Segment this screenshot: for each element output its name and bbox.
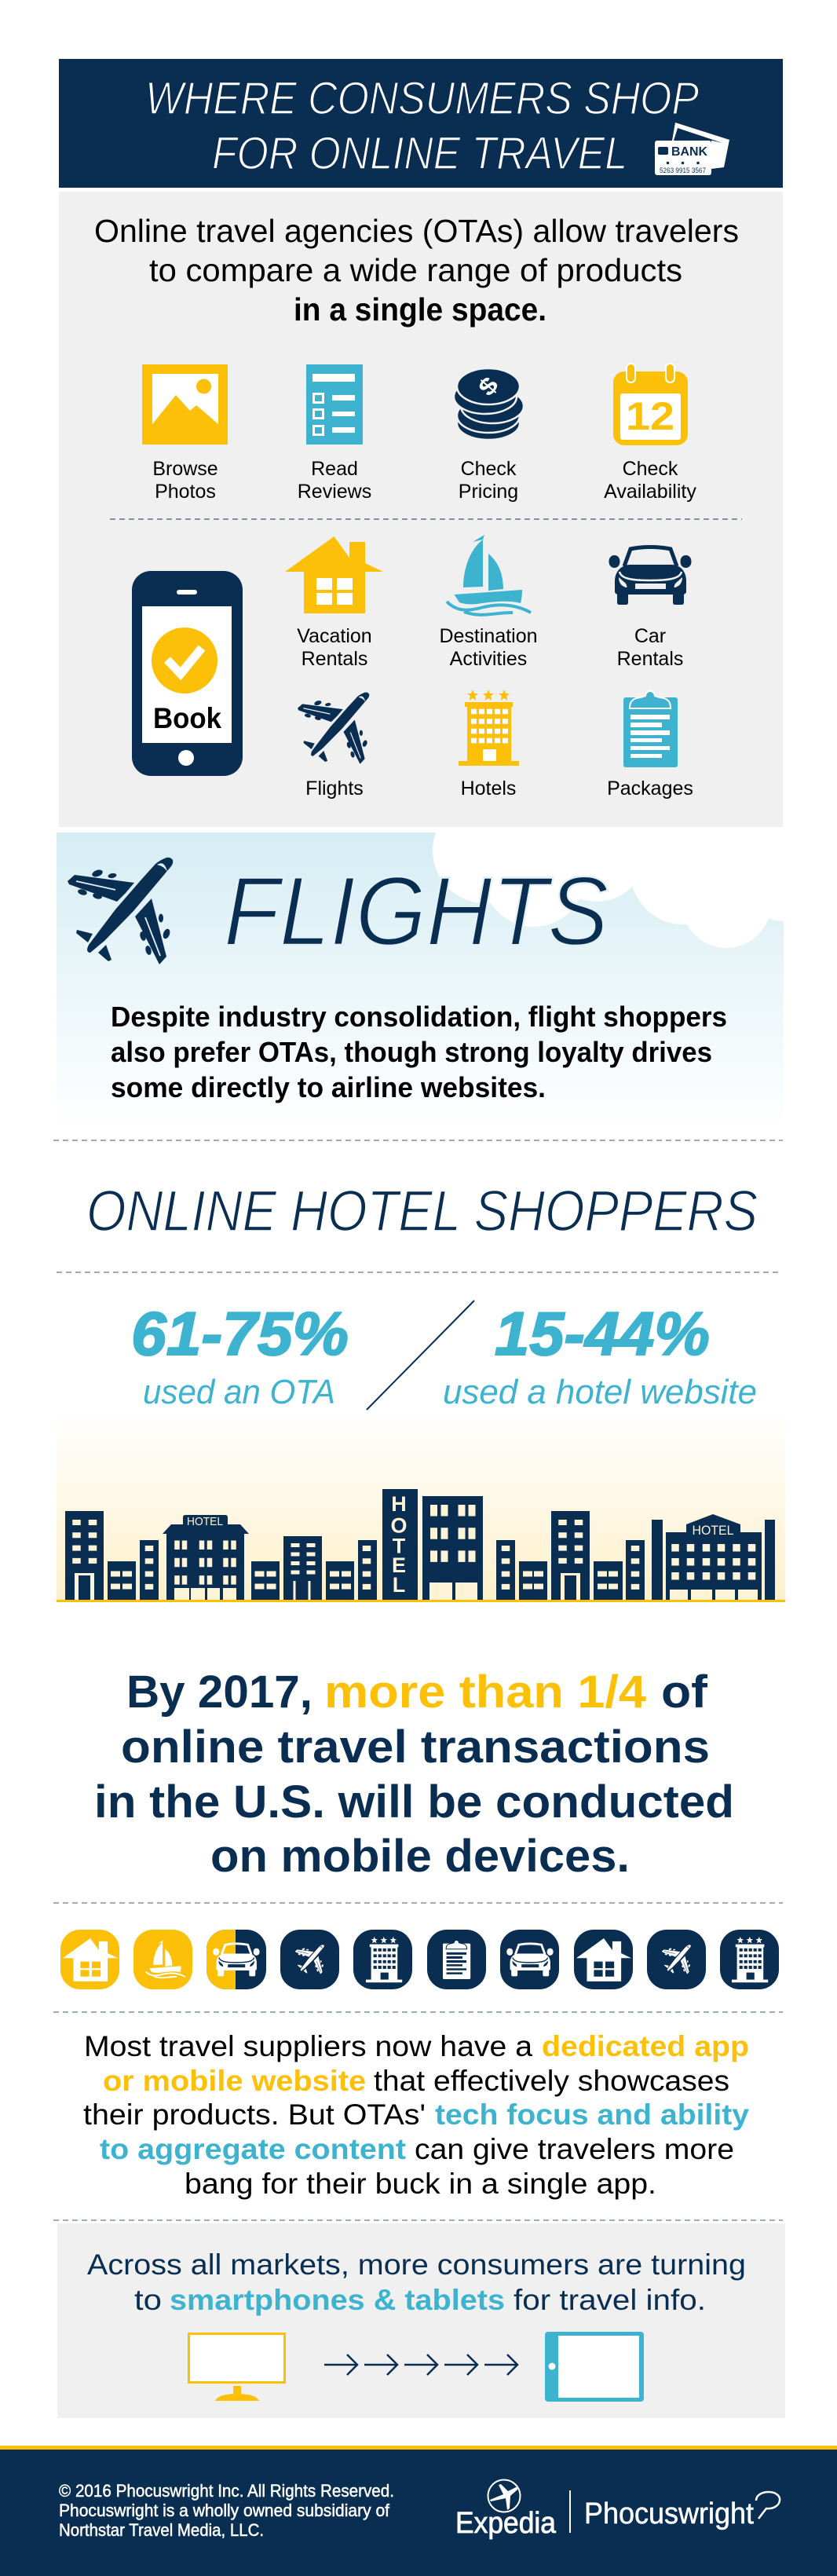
suppliers paragraph: Most travel suppliers now have a bbox=[84, 2030, 532, 2062]
feature labels row two bbox=[297, 625, 693, 800]
feature labels row two: Destination bbox=[439, 625, 538, 647]
stat: hotel website share: used a hotel website bbox=[443, 1373, 757, 1411]
feature labels row two: Rentals bbox=[302, 648, 367, 670]
stat: OTA share: used an OTA bbox=[143, 1373, 335, 1411]
callout text: to bbox=[134, 2284, 162, 2316]
body text: Despite industry consolidation, flight shoppers bbox=[111, 1001, 727, 1033]
icon: coins: $ bbox=[473, 371, 504, 401]
panel: across all markets bbox=[57, 2223, 785, 2418]
heading: ONLINE HOTEL SHOPPERS bbox=[86, 1180, 758, 1243]
feature labels row two: Activities bbox=[450, 648, 527, 670]
suppliers paragraph: their products. But OTAs' bbox=[83, 2098, 426, 2131]
icon: clipboard bbox=[623, 691, 678, 767]
city skyline: HOTEL bbox=[187, 1515, 223, 1528]
mobile headline: in the U.S. will be conducted bbox=[94, 1776, 734, 1828]
city skyline: O bbox=[390, 1514, 408, 1538]
icon: phone with book: Book bbox=[153, 702, 221, 734]
icon: car bbox=[609, 547, 691, 605]
suppliers paragraph: to aggregate content bbox=[100, 2133, 406, 2165]
feature labels row one: Photos bbox=[155, 481, 216, 503]
city skyline: HOTEL bbox=[693, 1523, 733, 1538]
feature labels row two: Vacation bbox=[297, 625, 372, 647]
icon: bank cards bbox=[655, 123, 729, 175]
intro text: in a single space. bbox=[294, 291, 546, 327]
icon: desktop monitor bbox=[188, 2334, 284, 2401]
suppliers paragraph: or mobile website bbox=[103, 2065, 366, 2097]
logo: Phocuswright: Phocuswright bbox=[584, 2497, 754, 2530]
suppliers paragraph: can give travelers more bbox=[415, 2133, 734, 2165]
feature labels row two: Car bbox=[634, 625, 666, 647]
icon: calendar: 12 bbox=[626, 394, 674, 438]
icon: plane bbox=[298, 693, 369, 764]
logo: Expedia: Expedia bbox=[455, 2507, 557, 2540]
divider slash bbox=[367, 1301, 474, 1410]
logo: Expedia bbox=[455, 2480, 557, 2540]
icon: browse photos bbox=[142, 364, 228, 445]
stat: hotel website share bbox=[443, 1299, 757, 1411]
body text bbox=[111, 1001, 727, 1103]
icon: sailboat bbox=[447, 535, 531, 615]
suppliers paragraph: tech focus and ability bbox=[435, 2098, 749, 2131]
feature labels row one: Reviews bbox=[298, 481, 371, 503]
body text: also prefer OTAs, though strong loyalty drives bbox=[111, 1036, 712, 1068]
footer bbox=[0, 2446, 837, 2576]
icon: bank cards: 5263 9915 3567 bbox=[660, 166, 706, 174]
icon: plane bbox=[68, 858, 173, 964]
icon: coins bbox=[454, 368, 524, 440]
tile: hotel bbox=[720, 1930, 779, 1989]
feature labels row one bbox=[152, 458, 696, 503]
callout text bbox=[87, 2249, 746, 2316]
city skyline: E bbox=[392, 1553, 406, 1577]
mobile headline: on mobile devices. bbox=[210, 1831, 630, 1882]
suppliers paragraph bbox=[83, 2030, 749, 2200]
icon: calendar bbox=[613, 364, 688, 445]
icon: bank cards: BANK bbox=[671, 145, 707, 159]
sky gradient bbox=[57, 1412, 785, 1601]
city skyline: L bbox=[393, 1573, 405, 1597]
tile: boat yellow bbox=[133, 1930, 192, 1989]
stat: OTA share bbox=[131, 1299, 349, 1411]
mobile headline bbox=[94, 1667, 734, 1882]
body text: some directly to airline websites. bbox=[111, 1071, 546, 1103]
stat: OTA share: 61-75% bbox=[131, 1299, 349, 1368]
feature labels row one: Check bbox=[461, 458, 517, 480]
feature labels row two: Flights bbox=[305, 778, 364, 800]
city skyline: H bbox=[391, 1492, 407, 1516]
callout text: for travel info. bbox=[514, 2284, 706, 2316]
tile: car half yellow bbox=[207, 1930, 266, 1989]
intro text bbox=[94, 213, 739, 327]
feature labels row one: Browse bbox=[152, 458, 218, 480]
feature labels row two: Rentals bbox=[617, 648, 683, 670]
mobile headline: more than 1/4 bbox=[324, 1667, 646, 1718]
copyright text: © 2016 Phocuswright Inc. All Rights Reserved. bbox=[59, 2481, 394, 2501]
section: online hotel shoppers bbox=[57, 1180, 785, 1602]
suppliers paragraph: that effectively showcases bbox=[374, 2065, 729, 2097]
suppliers paragraph: bang for their buck in a single app. bbox=[185, 2168, 656, 2200]
stat: hotel website share: 15-44% bbox=[495, 1299, 710, 1368]
heading: FOR ONLINE TRAVEL bbox=[212, 128, 627, 179]
icon: phone with book bbox=[132, 571, 243, 776]
tile: house bbox=[574, 1930, 633, 1989]
feature labels row one: Check bbox=[623, 458, 678, 480]
callout text: smartphones & tablets bbox=[170, 2284, 505, 2316]
copyright text: Phocuswright is a wholly owned subsidiary of bbox=[59, 2501, 390, 2520]
panel: flights bbox=[57, 832, 784, 1103]
intro text: Online travel agencies (OTAs) allow travelers bbox=[94, 213, 739, 249]
clouds bbox=[433, 832, 784, 948]
copyright text: Northstar Travel Media, LLC. bbox=[59, 2520, 264, 2540]
title banner bbox=[59, 59, 783, 188]
feature labels row one: Availability bbox=[604, 481, 696, 503]
feature labels row two: Hotels bbox=[461, 778, 516, 800]
tile: plane bbox=[280, 1930, 339, 1989]
icon: hotel bbox=[459, 690, 519, 766]
feature labels row one: Pricing bbox=[459, 481, 518, 503]
tile: house yellow bbox=[60, 1930, 119, 1989]
callout text: Across all markets, more consumers are turning bbox=[87, 2249, 746, 2281]
city skyline bbox=[65, 1489, 775, 1600]
icon: house bbox=[285, 536, 383, 613]
city skyline: T bbox=[393, 1535, 406, 1558]
feature labels row one: Read bbox=[311, 458, 358, 480]
arrows bbox=[324, 2355, 517, 2375]
heading: WHERE CONSUMERS SHOP bbox=[145, 73, 699, 124]
suppliers paragraph: dedicated app bbox=[542, 2030, 749, 2062]
heading: FLIGHTS bbox=[224, 858, 609, 966]
tile: hotel bbox=[353, 1930, 412, 1989]
mobile headline: of bbox=[661, 1667, 708, 1718]
tile: plane bbox=[647, 1930, 706, 1989]
intro text: to compare a wide range of products bbox=[149, 252, 682, 288]
icon: tablet bbox=[545, 2332, 644, 2402]
feature labels row two: Packages bbox=[607, 778, 693, 800]
tile: car bbox=[500, 1930, 559, 1989]
tile: clipboard bbox=[427, 1930, 486, 1989]
panel: OTA overview bbox=[59, 192, 783, 827]
icon strip bbox=[60, 1930, 779, 1989]
copyright text bbox=[59, 2481, 394, 2540]
icon: read reviews bbox=[306, 364, 363, 445]
mobile headline: online travel transactions bbox=[121, 1722, 710, 1773]
heading bbox=[145, 73, 699, 179]
mobile headline: By 2017, bbox=[126, 1667, 313, 1718]
